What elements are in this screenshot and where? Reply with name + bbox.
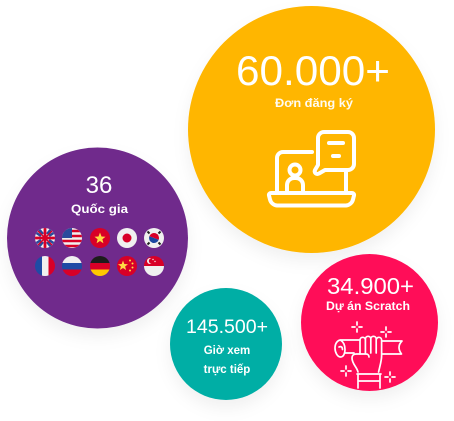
icon: Japan flag xyxy=(117,228,137,248)
icon: laptop with person and speech bubble xyxy=(269,132,354,206)
icon: France flag xyxy=(35,256,56,276)
label: Quốc gia: Quốc gia xyxy=(71,202,128,216)
label: Dự án Scratch: Dự án Scratch xyxy=(326,299,410,313)
label: Giờ xem: Giờ xem xyxy=(204,345,250,357)
heading: 36: 36 xyxy=(86,172,112,199)
icon: Russia flag xyxy=(62,256,82,276)
panel: countries circle xyxy=(7,148,188,328)
icon: Vietnam flag xyxy=(90,228,110,248)
label: Đơn đăng ký: Đơn đăng ký xyxy=(275,96,353,110)
heading: 145.500+: 145.500+ xyxy=(186,317,268,338)
icon: Germany flag xyxy=(90,256,110,276)
panel: Scratch projects circle xyxy=(301,254,438,391)
icon: US flag xyxy=(62,228,82,248)
panel: registrations circle xyxy=(188,6,435,253)
label: trực tiếp: trực tiếp xyxy=(204,364,250,376)
icon: South Korea flag xyxy=(144,228,164,248)
icon: Singapore flag xyxy=(144,256,164,276)
heading: 34.900+: 34.900+ xyxy=(327,273,414,299)
heading: 60.000+: 60.000+ xyxy=(236,47,390,94)
panel: live hours circle xyxy=(170,288,282,400)
flags grid xyxy=(35,228,164,276)
icon: hand holding scroll xyxy=(335,322,402,388)
icon: UK flag xyxy=(35,228,55,248)
icon: China flag xyxy=(117,256,137,276)
